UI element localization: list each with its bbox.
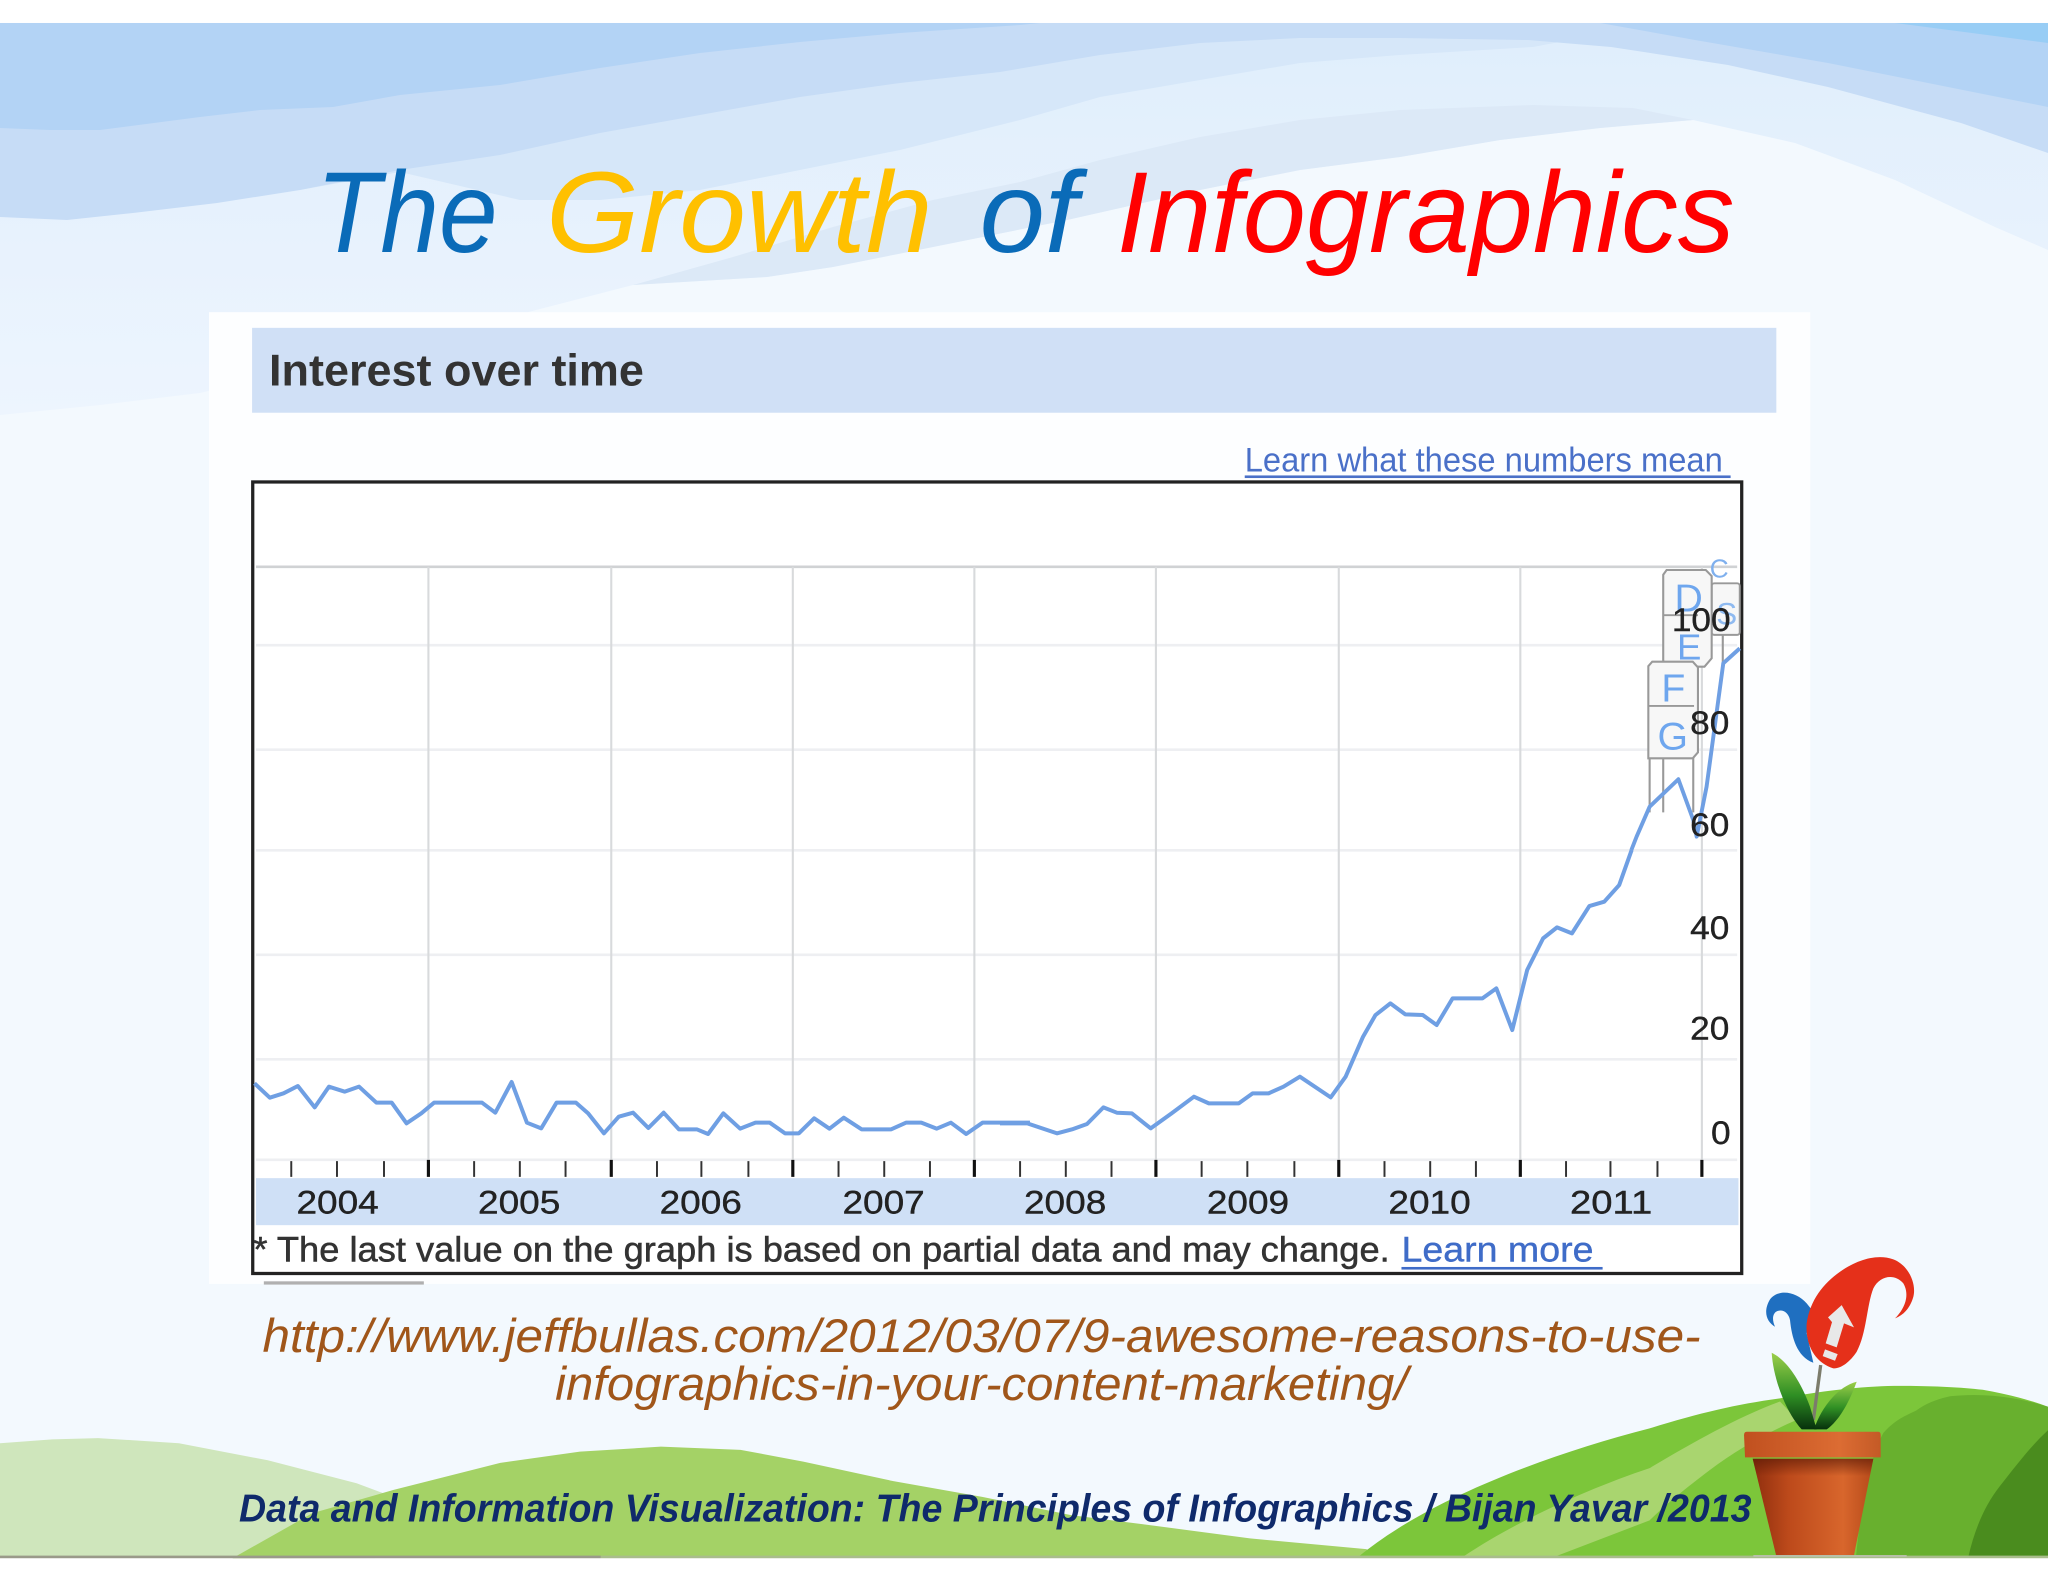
- y axis labels: 80: [1690, 704, 1729, 741]
- title: Infographics: [1117, 149, 1735, 277]
- x axis band with years: 2004: [296, 1183, 379, 1220]
- annotation tags: C: [1710, 553, 1729, 583]
- chart frame: [253, 482, 1742, 1273]
- y axis labels: 0: [1711, 1114, 1731, 1151]
- title: The: [316, 149, 498, 277]
- hills: [0, 1386, 2048, 1558]
- y axis labels: 20: [1690, 1010, 1729, 1047]
- line: search interest: [254, 648, 1740, 1134]
- footer credit: Data and Information Visualization: The Principles of Infographics / Bijan Yavar /2013: [239, 1488, 1752, 1531]
- x axis band with years: 2005: [478, 1183, 560, 1220]
- x axis band with years: [256, 1178, 1738, 1225]
- icon: flower pot logo: [1744, 1257, 1914, 1556]
- panel: interest over time chart: [209, 312, 1810, 1285]
- x axis band with years: 2007: [842, 1183, 925, 1220]
- annotation tags: D: [1674, 577, 1703, 620]
- x axis band with years: 2006: [660, 1183, 742, 1220]
- y axis labels: 100: [1672, 601, 1731, 638]
- source url: http://www.jeffbullas.com/2012/03/07/9-awesome-reasons-to-use-: [263, 1309, 1701, 1362]
- x axis band with years: 2011: [1570, 1183, 1652, 1220]
- y axis labels: 40: [1690, 909, 1729, 946]
- x axis band with years: 2010: [1388, 1183, 1471, 1220]
- annotation tags: S: [1716, 596, 1737, 631]
- annotation tags: [1648, 553, 1740, 812]
- annotation tags: F: [1661, 667, 1685, 710]
- x axis band with years: 2009: [1207, 1183, 1289, 1220]
- footnote: Learn more: [1401, 1231, 1593, 1270]
- heading band: Interest over time: [269, 346, 644, 395]
- x axis ticks: [291, 1160, 1702, 1177]
- y axis labels: [1672, 601, 1731, 1151]
- source url: [263, 1309, 1701, 1410]
- title: of: [980, 149, 1088, 277]
- source url: infographics-in-your-content-marketing/: [555, 1357, 1413, 1410]
- annotation tags: E: [1677, 627, 1701, 668]
- y axis labels: 60: [1690, 806, 1729, 843]
- title: [316, 149, 1735, 277]
- title: Growth: [546, 149, 933, 277]
- annotation tags: G: [1657, 716, 1688, 759]
- x axis band with years: 2008: [1024, 1183, 1106, 1220]
- link: learn what these numbers mean: Learn what these numbers mean: [1245, 442, 1723, 480]
- footnote: * The last value on the graph is based on partial data and may change.: [253, 1231, 1390, 1270]
- heading band: [252, 328, 1776, 413]
